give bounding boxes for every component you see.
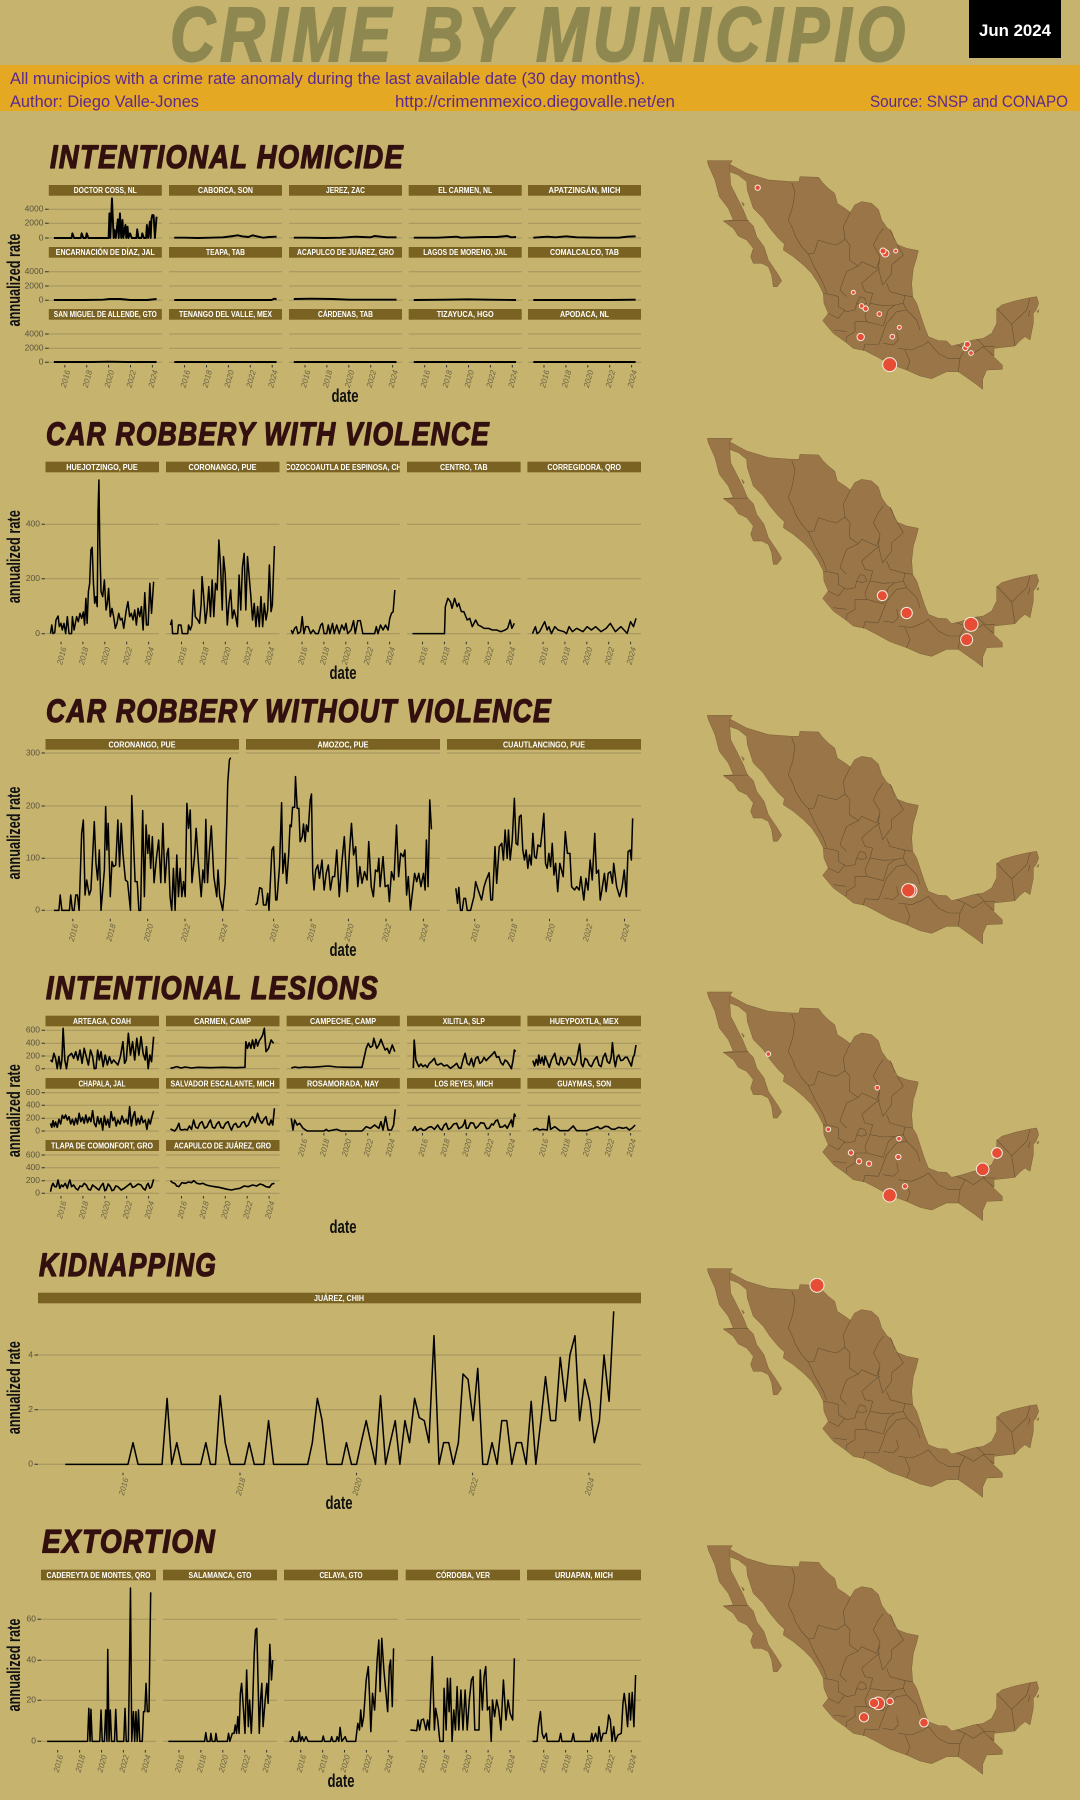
chart: Los Reyes: LOS REYES, MICH [435, 1079, 493, 1088]
chart: Cordoba: CÓRDOBA, VER [436, 1571, 490, 1580]
chart: Cardenas: 2016 [299, 369, 313, 390]
chart: Coronango: CORONANGO, PUE [188, 463, 257, 472]
chart: Ocozocoautla de Espinosa: OCOZOCOAUTLA DE ESPINOSA, CHP [280, 463, 407, 472]
heading: intentional lesions: INTENTIONAL LESIONS [46, 970, 379, 1006]
chart: Centro: 2020 [460, 646, 474, 667]
chart: Tlapa de Comonfort: 2020 [99, 1200, 112, 1221]
chart: Tizayuca: 2018 [441, 369, 454, 390]
y axis: 200 [26, 1050, 40, 1060]
chart: Guaymas: 2016 [537, 1137, 551, 1158]
chart: Campeche [287, 1016, 400, 1069]
chart: Xilitla [407, 1016, 521, 1069]
chart: Cadereyta de Montes: 2020 [95, 1753, 109, 1774]
chart: Cadereyta de Montes: 2022 [117, 1753, 131, 1774]
y axis: 2000 [25, 343, 44, 353]
chart: Coronango: CORONANGO, PUE [108, 740, 176, 749]
chart: Acapulco de Juarez: 2016 [175, 1200, 189, 1221]
chart: San Miguel de Allende: SAN MIGUEL DE ALLENDE, GTO [54, 310, 157, 319]
chart: Cordoba: 2022 [482, 1753, 496, 1774]
map: car robbery with violence [707, 438, 1039, 667]
date badge [969, 0, 1061, 58]
chart: Coronango: 2016 [67, 922, 80, 943]
map: extortion [707, 1546, 1039, 1774]
chart: Celaya: 2018 [317, 1753, 330, 1774]
chart: Cuautlancingo: 2020 [543, 922, 557, 943]
chart: Coronango: 2022 [179, 922, 193, 943]
chart: Tizayuca: 2016 [419, 369, 432, 390]
chart: Salamanca: 2016 [173, 1753, 187, 1774]
chart: Juarez: 2024 [583, 1476, 597, 1497]
chart: Corregidora [527, 462, 641, 667]
chart: Ocozocoautla de Espinosa [286, 462, 400, 666]
chart: Cadereyta de Montes: 2018 [74, 1753, 87, 1774]
chart: Rosamorada [287, 1078, 400, 1158]
chart: Coronango: 2016 [175, 646, 189, 667]
chart: Amozoc: 2016 [268, 922, 281, 943]
chart: Jerez [289, 185, 402, 238]
chart: Xilitla: XILITLA, SLP [443, 1017, 485, 1026]
y axis: 0 [35, 1063, 40, 1073]
chart: Guaymas: GUAYMAS, SON [557, 1079, 611, 1088]
chart: Tenango del Valle: TENANGO DEL VALLE, MEX [179, 310, 273, 319]
chart: San Miguel de Allende: 2016 [59, 369, 72, 390]
chart: Campeche: CAMPECHE, CAMP [310, 1017, 377, 1026]
chart: Huejotzingo: 2020 [99, 646, 112, 667]
chart: Uruapan: 2024 [625, 1753, 639, 1774]
chart: Centro: 2024 [504, 646, 518, 667]
chart: Los Reyes: 2022 [482, 1137, 496, 1158]
chart: San Miguel de Allende [49, 309, 162, 390]
y axis: annualized rate [4, 786, 24, 880]
chart: Uruapan: 2016 [538, 1753, 551, 1774]
chart: Juarez: 2022 [467, 1476, 480, 1497]
chart: Amozoc: 2022 [380, 922, 394, 943]
chart: Tenango del Valle: 2016 [179, 369, 192, 390]
chart: Salvador Escalante: SALVADOR ESCALANTE, MICH [170, 1079, 275, 1088]
chart: Celaya: 2016 [295, 1753, 308, 1774]
chart: Tizayuca [409, 309, 522, 390]
chart: Salamanca: 2024 [261, 1753, 274, 1774]
chart: Hueypoxtla: HUEYPOXTLA, MEX [550, 1017, 619, 1026]
chart: Teapa [169, 247, 282, 300]
chart: Cuautlancingo: CUAUTLANCINGO, PUE [503, 740, 586, 749]
chart: Cuautlancingo: 2018 [506, 922, 520, 943]
y axis: 40 [27, 1655, 36, 1665]
chart: Juarez: 2020 [350, 1476, 364, 1497]
chart: Apatzingan: APATZINGÁN, MICH [548, 186, 621, 195]
chart: Cadereyta de Montes: 2016 [52, 1753, 65, 1774]
chart: Chapala [46, 1078, 159, 1131]
chart: Cardenas: 2018 [321, 369, 335, 390]
chart: Tlapa de Comonfort: 2016 [55, 1200, 69, 1221]
chart: San Miguel de Allende: 2024 [146, 369, 160, 390]
y axis: annualized rate [4, 1618, 24, 1712]
chart: Cuautlancingo: 2022 [581, 922, 595, 943]
chart: Tenango del Valle: 2024 [266, 369, 280, 390]
chart: Uruapan: 2022 [603, 1753, 617, 1774]
y axis: 60 [27, 1614, 36, 1624]
y axis: 200 [26, 1113, 40, 1123]
chart: Cordoba: 2018 [438, 1753, 452, 1774]
chart: Los Reyes: 2016 [416, 1137, 430, 1158]
chart: Guaymas: 2022 [603, 1137, 616, 1158]
panel: kidnapping [4, 1247, 1039, 1513]
chart: Acapulco de Juarez: 2022 [241, 1200, 255, 1221]
chart: Carmen [166, 1016, 280, 1069]
chart: Cordoba: 2016 [416, 1753, 430, 1774]
chart: Corregidora: 2022 [603, 646, 616, 667]
chart: Amozoc: AMOZOC, PUE [318, 740, 369, 749]
map: intentional lesions [707, 992, 1039, 1221]
chart: Corregidora: CORREGIDORA, QRO [547, 463, 621, 472]
heading: kidnapping: KIDNAPPING [39, 1247, 217, 1283]
y axis: 400 [26, 519, 40, 529]
chart: Comalcalco [528, 247, 641, 300]
chart: Salamanca: 2018 [195, 1753, 209, 1774]
info banner: http://crimenmexico.diegovalle.net/en [395, 92, 675, 111]
chart: Cardenas: 2020 [343, 369, 356, 390]
chart: Ocozocoautla de Espinosa: 2016 [296, 646, 310, 667]
chart: Hueypoxtla [527, 1016, 641, 1069]
chart: El Carmen: EL CARMEN, NL [438, 186, 492, 195]
chart: Centro: CENTRO, TAB [440, 463, 488, 472]
chart: Ocozocoautla de Espinosa: 2024 [384, 646, 397, 667]
heading: intentional homicide: INTENTIONAL HOMICIDE [50, 139, 404, 175]
y axis: annualized rate [4, 510, 24, 603]
chart: Huejotzingo: 2022 [121, 646, 134, 667]
chart: Corregidora: 2020 [581, 646, 594, 667]
chart: Uruapan [527, 1570, 641, 1774]
chart: Centro: 2016 [416, 646, 430, 667]
chart: Amozoc [246, 739, 440, 943]
y axis: 600 [26, 1149, 40, 1159]
chart: Apatzingan [528, 185, 641, 238]
y axis: 200 [26, 573, 40, 583]
x axis title: date [326, 1493, 352, 1513]
heading: car robbery with violence: CAR ROBBERY WITH VIOLENCE [46, 416, 490, 452]
map: intentional homicide [707, 161, 1039, 389]
chart: Tlapa de Comonfort: 2018 [77, 1200, 91, 1221]
chart: Coronango [46, 739, 239, 943]
x axis title: date [330, 940, 356, 960]
chart: San Miguel de Allende: 2018 [81, 369, 94, 390]
y axis: 4 [28, 1349, 33, 1359]
chart: Uruapan: 2018 [560, 1753, 573, 1774]
y axis [4, 747, 45, 915]
chart: Salvador Escalante [166, 1078, 280, 1131]
chart: Tizayuca: 2024 [506, 369, 520, 390]
y axis [4, 1614, 41, 1746]
chart: Guaymas: 2018 [559, 1137, 573, 1158]
chart: Centro: 2018 [438, 646, 452, 667]
y axis: 0 [35, 1125, 40, 1135]
chart: Centro [407, 462, 521, 667]
chart: El Carmen [409, 185, 522, 238]
chart: Salamanca: 2022 [239, 1753, 252, 1774]
y axis: 0 [39, 232, 44, 242]
y axis [4, 204, 49, 367]
chart: Los Reyes [407, 1078, 521, 1158]
chart: Tizayuca: 2022 [484, 369, 498, 390]
chart: Cardenas: CÁRDENAS, TAB [318, 310, 373, 319]
chart: Caborca [169, 185, 282, 238]
y axis: 4000 [25, 266, 44, 276]
chart: Rosamorada: 2016 [296, 1137, 310, 1158]
y axis: annualized rate [4, 234, 24, 326]
chart: Los Reyes: 2024 [504, 1137, 518, 1158]
chart: Tenango del Valle [169, 309, 282, 390]
chart: Cordoba [406, 1570, 520, 1774]
y axis: 0 [28, 1459, 33, 1469]
chart: Celaya: 2024 [382, 1753, 396, 1774]
chart: Cadereyta de Montes: CADEREYTA DE MONTES, QRO [46, 1571, 150, 1580]
y axis: 0 [35, 628, 40, 638]
y axis [4, 510, 45, 638]
y axis: 400 [26, 1162, 40, 1172]
chart: Cuautlancingo: 2016 [469, 922, 482, 943]
chart: Comalcalco: COMALCALCO, TAB [550, 248, 619, 257]
chart: Salamanca [163, 1570, 277, 1774]
y axis: 0 [31, 1736, 36, 1746]
chart: Coronango: 2020 [142, 922, 155, 943]
chart: Cordoba: 2020 [460, 1753, 474, 1774]
chart: Celaya: 2020 [338, 1753, 352, 1774]
chart: Amozoc: 2024 [417, 922, 431, 943]
heading: car robbery without violence: CAR ROBBERY WITHOUT VIOLENCE [46, 693, 552, 729]
chart: Ocozocoautla de Espinosa: 2020 [340, 646, 353, 667]
chart: Tizayuca: 2020 [462, 369, 476, 390]
y axis: annualized rate [4, 1064, 24, 1157]
chart: Cardenas: 2022 [365, 369, 378, 390]
x axis title: date [330, 663, 356, 683]
chart: San Miguel de Allende: 2022 [124, 369, 138, 390]
chart: Guaymas [527, 1078, 641, 1158]
x axis title: date [332, 386, 358, 406]
y axis: 600 [26, 1087, 40, 1097]
heading: extortion: EXTORTION [42, 1524, 216, 1560]
chart: Doctor Coss: DOCTOR COSS, NL [74, 186, 137, 195]
chart: Ocozocoautla de Espinosa: 2022 [362, 646, 375, 667]
y axis: 0 [39, 295, 44, 305]
chart: Uruapan: 2020 [581, 1753, 595, 1774]
info banner [0, 65, 1080, 111]
chart: Tlapa de Comonfort [46, 1140, 159, 1221]
y axis: 600 [26, 1025, 40, 1035]
chart: Juarez: 2018 [234, 1476, 248, 1497]
chart: Rosamorada: 2024 [384, 1137, 397, 1158]
chart: Huejotzingo: HUEJOTZINGO, PUE [66, 463, 138, 472]
chart: Juarez: 2016 [117, 1476, 131, 1497]
chart: Huejotzingo: 2018 [77, 646, 91, 667]
chart: Acapulco de Juarez: 2018 [197, 1200, 211, 1221]
chart: Acapulco de Juarez [166, 1140, 280, 1221]
chart: Tenango del Valle: 2018 [200, 369, 214, 390]
chart: Carmen: CARMEN, CAMP [194, 1017, 252, 1026]
y axis: annualized rate [4, 1341, 24, 1434]
chart: Apodaca: 2020 [582, 369, 595, 390]
chart: Corregidora: 2024 [625, 646, 638, 667]
chart: Ocozocoautla de Espinosa: 2018 [318, 646, 332, 667]
chart: Apodaca: 2018 [560, 369, 574, 390]
chart: Coronango: 2018 [104, 922, 118, 943]
chart: Tizayuca: TIZAYUCA, HGO [437, 310, 494, 319]
chart: Cuautlancingo: 2024 [618, 922, 632, 943]
y axis: 2000 [25, 218, 44, 228]
chart: Guaymas: 2024 [625, 1137, 638, 1158]
y axis: 4000 [25, 204, 44, 214]
y axis: 0 [35, 1188, 40, 1198]
chart: Teapa: TEAPA, TAB [206, 248, 245, 257]
chart: Apodaca [528, 309, 641, 390]
chart: Jerez: JEREZ, ZAC [326, 186, 365, 195]
chart: Juarez: JUÁREZ, CHIH [314, 1294, 364, 1303]
panel: intentional homicide [4, 139, 1039, 406]
x axis title: date [330, 1217, 356, 1237]
chart: Rosamorada: 2018 [318, 1137, 332, 1158]
chart: Apodaca: 2024 [626, 369, 639, 390]
chart: Encarnacion de Diaz [49, 247, 162, 300]
chart: Huejotzingo: 2016 [55, 646, 69, 667]
chart: Rosamorada: 2020 [340, 1137, 353, 1158]
chart: Acapulco de Juarez: 2024 [263, 1200, 277, 1221]
chart: Corregidora: 2018 [559, 646, 573, 667]
chart: Coronango: 2022 [241, 646, 255, 667]
chart: Tenango del Valle: 2020 [222, 369, 236, 390]
panel: car robbery without violence [4, 693, 1039, 960]
chart: Cordoba: 2024 [504, 1753, 518, 1774]
chart: Arteaga: ARTEAGA, COAH [73, 1017, 131, 1026]
chart: Acapulco: ACAPULCO DE JUÁREZ, GRO [297, 248, 394, 257]
y axis: 0 [39, 357, 44, 367]
chart: Juarez [38, 1293, 641, 1497]
chart: Lagos de Moreno: LAGOS DE MORENO, JAL [423, 248, 507, 257]
chart: Tenango del Valle: 2022 [244, 369, 258, 390]
chart: Corregidora: 2016 [537, 646, 551, 667]
y axis: 400 [26, 1100, 40, 1110]
chart: Apodaca: 2016 [538, 369, 552, 390]
chart: Coronango [166, 462, 280, 667]
y axis: 2000 [25, 280, 44, 290]
chart: Salamanca: SALAMANCA, GTO [188, 1571, 252, 1580]
chart: Cadereyta de Montes [41, 1570, 156, 1774]
y axis: 100 [26, 853, 40, 863]
chart: Tlapa de Comonfort: TLAPA DE COMONFORT, GRO [51, 1142, 153, 1150]
chart: Huejotzingo [46, 462, 159, 667]
chart: Los Reyes: 2020 [460, 1137, 474, 1158]
map: kidnapping [707, 1269, 1039, 1497]
chart: Encarnacion de Diaz: ENCARNACIÓN DE DÍAZ, JAL [56, 248, 155, 257]
y axis: 20 [27, 1695, 36, 1705]
chart: Salamanca: 2020 [217, 1753, 230, 1774]
y axis [4, 1025, 45, 1198]
y axis [4, 1341, 38, 1469]
chart: Tlapa de Comonfort: 2022 [121, 1200, 134, 1221]
y axis: 300 [26, 747, 40, 757]
chart: Celaya: 2022 [360, 1753, 374, 1774]
chart: Cardenas [289, 309, 402, 390]
chart: Coronango: 2024 [263, 646, 277, 667]
panel: car robbery with violence [4, 416, 1039, 683]
chart: San Miguel de Allende: 2020 [103, 369, 116, 390]
info banner: Author: Diego Valle-Jones [10, 92, 199, 111]
chart: Guaymas: 2020 [581, 1137, 594, 1158]
chart: Coronango: 2018 [197, 646, 211, 667]
chart: Lagos de Moreno [409, 247, 522, 300]
x axis title: date [328, 1771, 354, 1791]
chart: Celaya [284, 1570, 398, 1774]
panel: extortion [4, 1524, 1039, 1791]
y axis: 200 [26, 1175, 40, 1185]
chart: Rosamorada: 2022 [362, 1137, 375, 1158]
chart: Tlapa de Comonfort: 2024 [143, 1200, 156, 1221]
chart: Apodaca: APODACA, NL [560, 310, 609, 319]
chart: Amozoc: 2018 [305, 922, 319, 943]
chart: Acapulco [289, 247, 402, 300]
y axis: 2 [28, 1404, 33, 1414]
chart: Amozoc: 2020 [342, 922, 356, 943]
chart: Centro: 2022 [482, 646, 496, 667]
chart: Acapulco de Juarez: 2020 [219, 1200, 233, 1221]
chart: Coronango: 2024 [217, 922, 230, 943]
chart: Apodaca: 2022 [604, 369, 617, 390]
chart: Huejotzingo: 2024 [143, 646, 156, 667]
chart: Chapala: CHAPALA, JAL [78, 1079, 126, 1088]
chart: Cardenas: 2024 [387, 369, 400, 390]
chart: Arteaga [46, 1016, 159, 1069]
chart: Cadereyta de Montes: 2024 [139, 1753, 153, 1774]
y axis: 4000 [25, 328, 44, 338]
chart: Uruapan: URUAPAN, MICH [555, 1571, 613, 1580]
map: car robbery without violence [707, 715, 1039, 944]
date badge: Jun 2024 [979, 21, 1052, 40]
y axis: 400 [26, 1038, 40, 1048]
chart: Caborca: CABORCA, SON [198, 186, 253, 195]
info banner: All municipios with a crime rate anomaly during the last available date (30 day months). [10, 69, 645, 88]
chart: Los Reyes: 2018 [438, 1137, 452, 1158]
chart: Cuautlancingo [447, 739, 641, 943]
chart: Acapulco de Juarez: ACAPULCO DE JUÁREZ, GRO [174, 1142, 271, 1150]
chart: Doctor Coss [49, 185, 162, 238]
chart: Celaya: CELAYA, GTO [320, 1571, 362, 1580]
panel: intentional lesions [4, 970, 1039, 1237]
chart: Rosamorada: ROSAMORADA, NAY [307, 1079, 380, 1088]
y axis: 0 [35, 905, 40, 915]
chart: Coronango: 2020 [219, 646, 233, 667]
y axis: 200 [26, 800, 40, 810]
